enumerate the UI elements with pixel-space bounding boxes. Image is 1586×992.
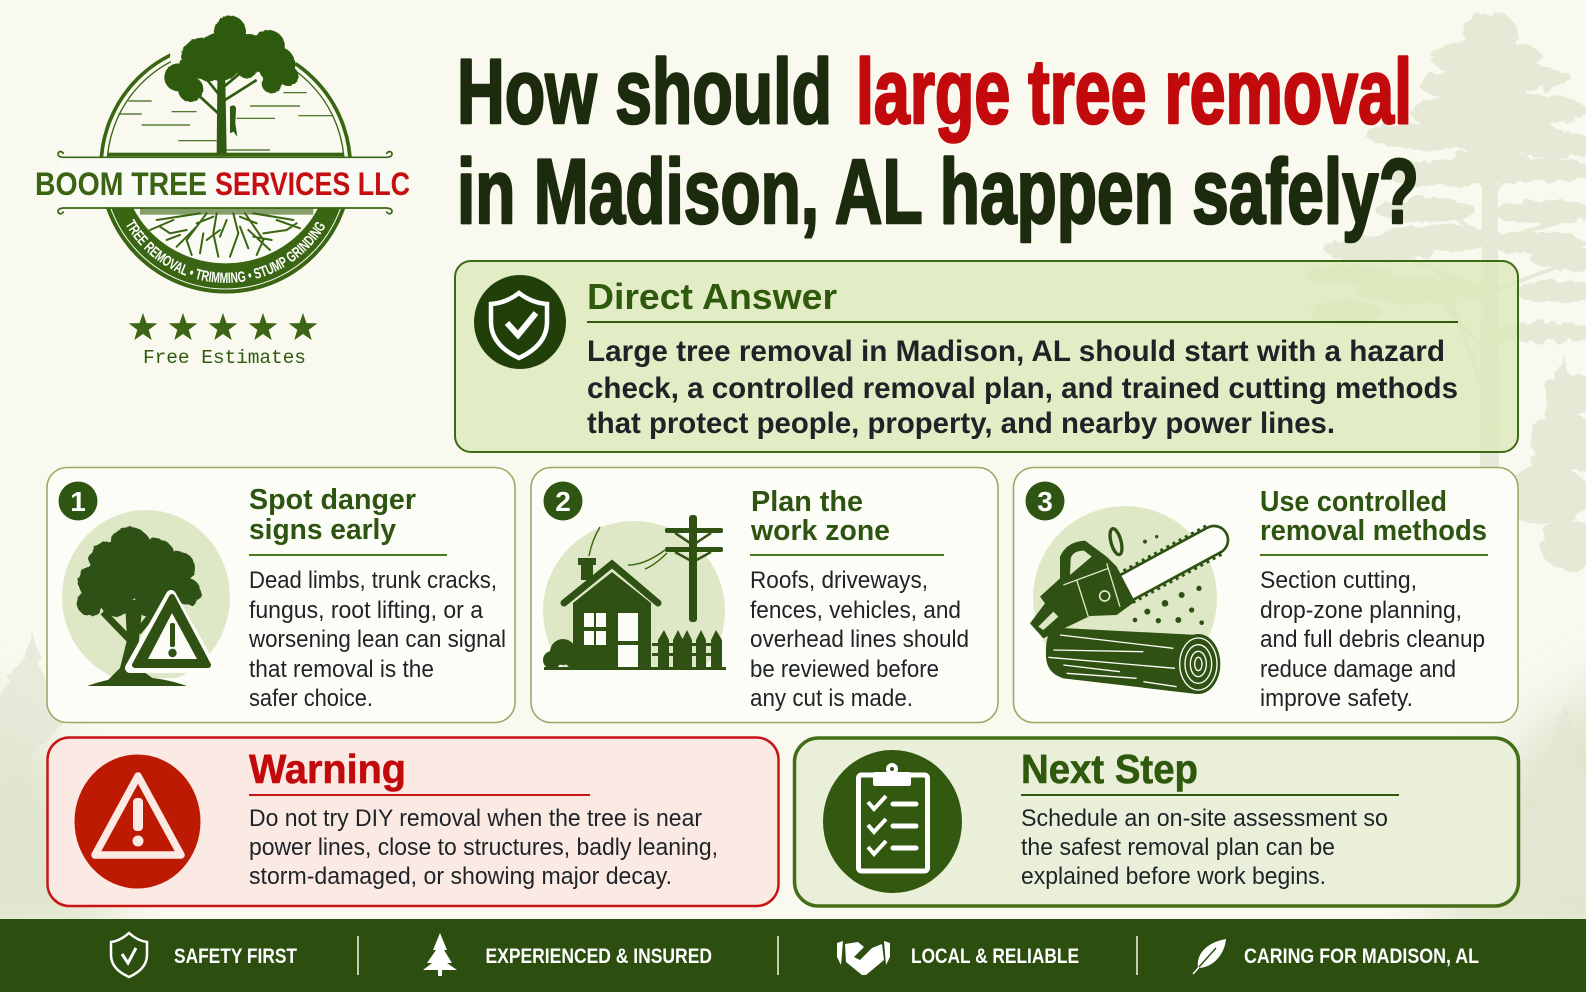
warning text: Do not try DIY removal when the tree is near <box>249 805 702 832</box>
warning heading: Warning <box>249 746 406 792</box>
footer label: caring: CARING FOR MADISON, AL <box>1244 945 1479 968</box>
step 1 text <box>248 567 506 712</box>
step 3 text: Section cutting, <box>1260 567 1417 594</box>
step 2 text <box>750 567 969 712</box>
step 3 number badge <box>1026 482 1064 520</box>
background: large pine silhouette <box>1305 12 1586 570</box>
footer label: safety first: SAFETY FIRST <box>174 945 297 968</box>
step 2 text: fences, vehicles, and <box>750 597 961 624</box>
logo: company name: SERVICES LLC <box>215 166 410 202</box>
footer bar <box>0 919 1586 992</box>
logo ground <box>107 153 343 156</box>
panel: warning <box>48 738 778 906</box>
icon: clipboard <box>823 750 962 893</box>
warning text: storm-damaged, or showing major decay. <box>249 863 672 890</box>
footer label: experienced: EXPERIENCED & INSURED <box>486 945 712 968</box>
logo: company name: BOOM TREE <box>35 166 207 202</box>
step 3 heading: removal methods <box>1260 515 1487 547</box>
next step text: explained before work begins. <box>1021 863 1326 890</box>
icon: footer handshake <box>837 941 890 975</box>
next step heading: Next Step <box>1021 746 1198 792</box>
logo ring <box>101 42 350 292</box>
background: small pines <box>0 632 1586 900</box>
step 3 illustration <box>1030 506 1220 694</box>
step 3 text: reduce damage and <box>1260 656 1456 683</box>
logo lower band <box>106 208 345 294</box>
step 3 number badge: 3 <box>1037 486 1053 517</box>
panel: step 1 <box>47 468 515 722</box>
step 2 number badge: 2 <box>555 486 571 517</box>
logo ribbon <box>60 157 390 207</box>
logo clouds <box>118 93 333 150</box>
step 2 number badge <box>544 482 582 520</box>
logo: services arc text: TREE REMOVAL • TRIMMING • STUMP GRINDING <box>126 218 325 283</box>
step 1 heading: signs early <box>249 514 396 546</box>
step 3 text: drop-zone planning, <box>1260 597 1462 624</box>
next step text: Schedule an on-site assessment so <box>1021 805 1388 832</box>
direct answer text: that protect people, property, and nearby power lines. <box>587 407 1335 440</box>
warning text <box>249 805 718 890</box>
step 3 text <box>1260 567 1485 712</box>
next step text <box>1021 805 1388 890</box>
step 1 heading <box>249 484 416 546</box>
logo tree <box>164 16 298 153</box>
step 1 text: worsening lean can signal <box>248 626 506 653</box>
icon: shield <box>474 275 566 369</box>
step 3 text: and full debris cleanup <box>1260 626 1485 653</box>
step 3 heading: Use controlled <box>1260 486 1447 518</box>
warning text: power lines, close to structures, badly leaning, <box>249 834 718 861</box>
step 1 heading: Spot danger <box>249 484 416 516</box>
title <box>457 41 1419 243</box>
step 2 text: be reviewed before <box>750 656 939 683</box>
step 1 text: Dead limbs, trunk cracks, <box>249 567 497 594</box>
panel: next step <box>794 738 1518 906</box>
step 1 number badge <box>58 482 98 520</box>
logo <box>58 16 392 293</box>
next step text: the safest removal plan can be <box>1021 834 1335 861</box>
step 3 heading <box>1260 486 1487 547</box>
step 2 text: any cut is made. <box>750 685 913 712</box>
step 1 number badge: 1 <box>70 486 86 517</box>
logo: company name <box>35 166 410 202</box>
panel: step 2 <box>531 468 998 722</box>
footer label: local: LOCAL & RELIABLE <box>911 945 1079 968</box>
direct answer text: Large tree removal in Madison, AL should start with a hazard <box>587 335 1445 368</box>
step 2 heading: work zone <box>750 515 890 547</box>
step 2 text: overhead lines should <box>750 626 969 653</box>
step 2 heading <box>750 486 890 547</box>
icon: warning triangle <box>74 754 200 888</box>
icon: footer leaf <box>1193 939 1226 974</box>
logo ribbon rules <box>58 151 392 214</box>
logo roots <box>150 213 300 257</box>
background haze <box>0 660 1586 950</box>
panel: direct answer <box>455 261 1518 452</box>
step 2 text: Roofs, driveways, <box>750 567 928 594</box>
panel: step 3 <box>1014 468 1518 722</box>
step 2 illustration <box>543 515 726 670</box>
step 3 text: improve safety. <box>1260 685 1413 712</box>
rating stars <box>129 313 317 340</box>
direct answer text: check, a controlled removal plan, and trained cutting methods <box>587 372 1458 405</box>
step 1 text: that removal is the <box>249 656 434 683</box>
title: How should <box>457 41 832 143</box>
direct answer text <box>587 335 1458 440</box>
direct answer heading: Direct Answer <box>587 276 837 317</box>
step 1 text: safer choice. <box>249 685 373 712</box>
icon: footer shield <box>111 933 147 977</box>
step 2 heading: Plan the <box>751 486 863 518</box>
step 1 text: fungus, root lifting, or a <box>249 597 484 624</box>
free estimates label: Free Estimates <box>143 347 306 369</box>
step 1 illustration <box>62 510 230 686</box>
icon: footer pine <box>423 933 457 976</box>
